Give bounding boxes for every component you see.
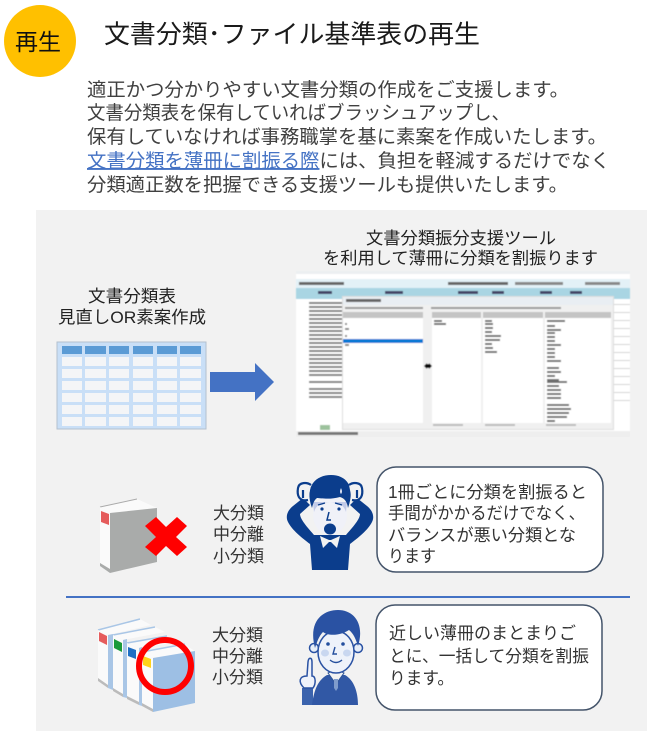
labels: classification levels, bad case: 大分類 (213, 504, 264, 523)
heading: support tool: を利用して薄冊に分類を割振ります (323, 249, 598, 268)
heading: table review: 見直しOR素案作成 (58, 308, 206, 327)
speech bubble: good case: 近しい薄冊のまとまりご (389, 623, 576, 643)
heading: table review: 文書分類表 (88, 287, 176, 306)
panel: gray background (36, 210, 647, 731)
red circle (139, 640, 191, 692)
badge: 再生: 再生 (15, 29, 61, 55)
speech bubble: good case: とに、一括して分類を割振 (389, 646, 589, 666)
icon: single book with red cross (100, 499, 187, 573)
screenshot: spreadsheet tool (296, 271, 630, 437)
heading: support tool (323, 229, 598, 268)
labels: classification levels, bad case (213, 504, 264, 566)
speech bubble: bad case: バランスが悪い分類とな (388, 525, 576, 545)
labels: classification levels, good case (212, 626, 263, 687)
labels: classification levels, bad case: 中分離 (213, 525, 264, 544)
red cross (145, 517, 187, 556)
intro text block (87, 79, 610, 196)
heading: table review (58, 287, 206, 327)
labels: classification levels, bad case: 小分類 (213, 547, 264, 566)
speech bubble: bad case (377, 467, 603, 572)
screenshot grid rows (309, 302, 343, 398)
dialog (342, 296, 614, 430)
intro text block: 保有していなければ事務職掌を基に素案を作成いたします。 (87, 126, 607, 148)
intro text block: 文書分類を薄冊に割振る際には、負担を軽減するだけでなく (87, 150, 610, 172)
intro text block: 適正かつ分かりやすい文書分類の作成をご支援します。 (87, 79, 569, 101)
intro text block: 文書分類表を保有していればブラッシュアップし、 (87, 101, 510, 124)
title: 文書分類･ファイル基準表の再生 (104, 21, 480, 49)
labels: classification levels, good case: 小分類 (212, 668, 263, 687)
arrow (210, 363, 274, 401)
icon: table (57, 342, 206, 429)
divider (66, 596, 630, 598)
icon: row of books with red circle (98, 619, 195, 712)
intro text block: 分類適正数を把握できる支援ツールも提供いたします。 (87, 174, 568, 196)
icon: confident man (300, 610, 362, 705)
speech bubble: good case: ります。 (389, 668, 454, 688)
speech bubble: good case (376, 605, 602, 710)
heading: support tool: 文書分類振分支援ツール (366, 229, 556, 248)
labels: classification levels, good case: 中分離 (212, 647, 263, 666)
badge: 再生 (4, 5, 76, 77)
icon: worried man (287, 475, 373, 570)
labels: classification levels, good case: 大分類 (212, 626, 263, 645)
speech bubble: bad case: 1冊ごとに分類を割振ると (388, 482, 587, 502)
speech bubble: bad case: ります (388, 546, 436, 566)
speech bubble: bad case: 手間がかかるだけでなく、 (388, 503, 585, 523)
